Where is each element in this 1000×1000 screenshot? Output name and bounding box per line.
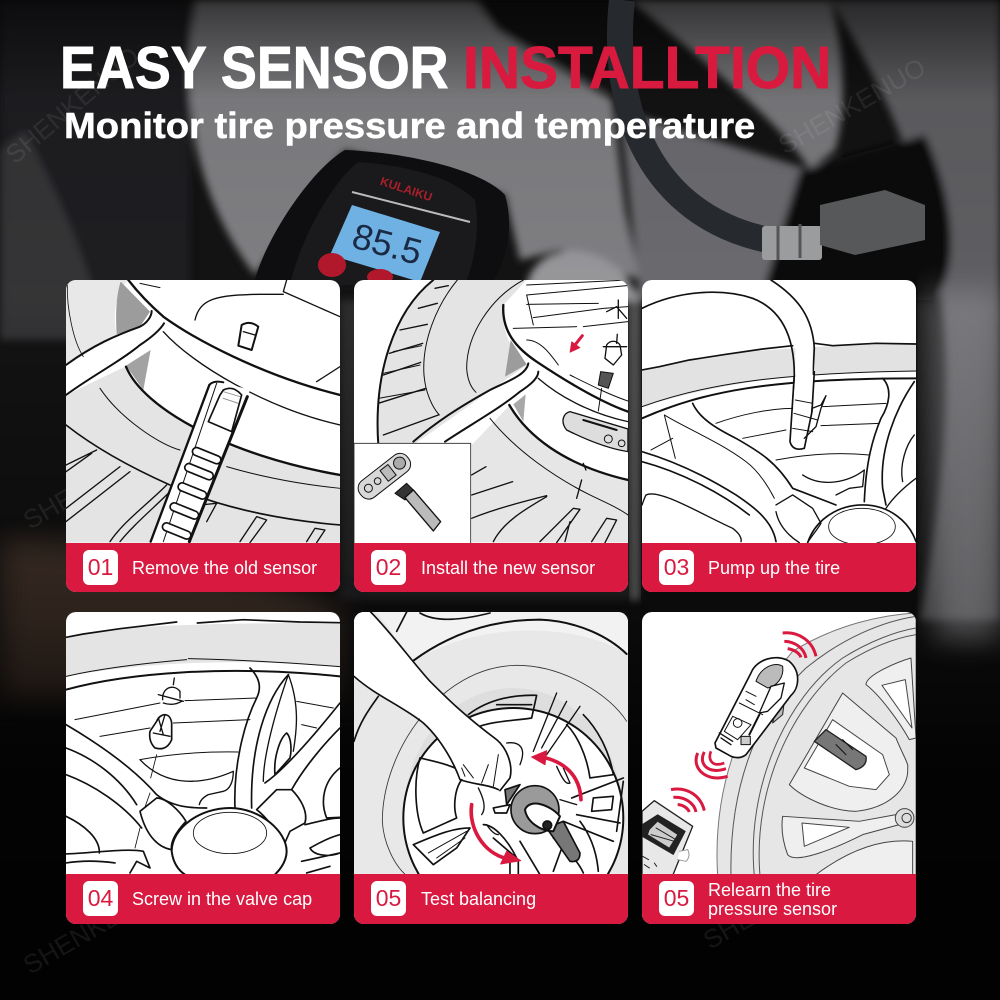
panel: step 06 relearn xyxy=(642,612,916,924)
step 02 label bar xyxy=(354,543,628,592)
step 05 label bar xyxy=(354,874,628,924)
step 04 label bar: Screw in the valve cap xyxy=(132,889,312,909)
watermarks: SHENKENUO xyxy=(18,872,176,980)
panel: step 04 xyxy=(66,612,340,924)
watermarks: SHENKENUO xyxy=(773,52,931,160)
step 06 label bar: pressure sensor xyxy=(708,899,837,919)
title: EASY SENSOR xyxy=(60,35,449,101)
title: INSTALLTION xyxy=(463,35,831,101)
step 06 label bar xyxy=(642,874,916,924)
hose xyxy=(620,0,768,240)
panel: step 05 test balancing xyxy=(354,612,628,924)
step 02 label bar: 02 xyxy=(376,554,401,580)
step 05 label bar: Test balancing xyxy=(421,889,536,909)
gauge: KULAIKU xyxy=(378,174,434,204)
gauge xyxy=(255,150,509,285)
title xyxy=(60,35,831,101)
panel: step 01 xyxy=(66,280,340,592)
watermarks: SHENKENUO xyxy=(698,847,856,955)
step 01 label bar: 01 xyxy=(88,554,113,580)
step 06 label bar: 05 xyxy=(664,885,689,911)
step 04 label bar: 04 xyxy=(88,885,113,911)
panel: step 03 xyxy=(642,280,916,592)
watermarks: SHENKENUO xyxy=(18,427,176,535)
step 04 label bar xyxy=(66,874,340,924)
step 01 label bar: Remove the old sensor xyxy=(132,558,317,578)
step 06 label bar: Relearn the tire xyxy=(708,880,831,900)
step 01 label bar xyxy=(66,543,340,592)
gauge: 85.5 xyxy=(348,215,426,273)
step 03 label bar: Pump up the tire xyxy=(708,558,840,578)
step 02 label bar: Install the new sensor xyxy=(421,558,595,578)
step 03 label bar xyxy=(642,543,916,592)
watermarks: SHENKENUO xyxy=(0,41,145,170)
valve connector xyxy=(762,190,925,260)
step 05 label bar: 05 xyxy=(376,885,401,911)
step 03 label bar: 03 xyxy=(664,554,689,580)
panel: step 02 xyxy=(354,280,628,592)
subtitle: Monitor tire pressure and temperature xyxy=(64,105,755,146)
